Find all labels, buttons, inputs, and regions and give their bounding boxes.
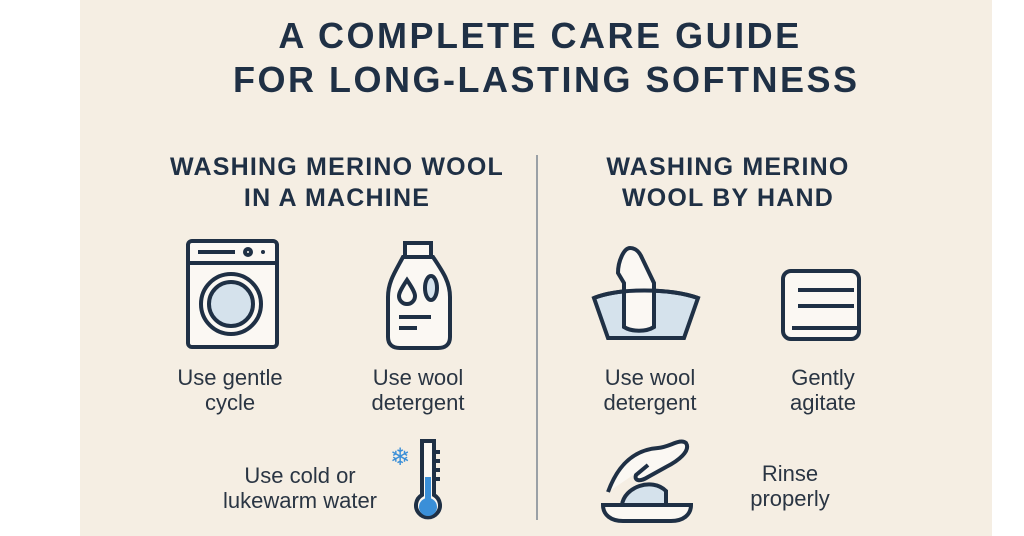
icon: hand rinsing xyxy=(601,440,693,523)
label: gentle cycle xyxy=(177,365,283,415)
label: rinse properly: properly xyxy=(750,486,830,511)
icon: folded towel xyxy=(781,269,861,341)
label: wool detergent hand xyxy=(604,365,696,415)
heading: hand xyxy=(606,153,850,212)
icon: washing machine xyxy=(186,239,279,349)
label: wool detergent machine xyxy=(372,365,464,415)
heading: hand: WOOL BY HAND xyxy=(622,184,834,212)
label: cold water: Use cold or xyxy=(244,463,356,488)
icon: basin with bottle xyxy=(592,246,700,340)
title xyxy=(233,15,860,100)
title: FOR LONG-LASTING SOFTNESS xyxy=(233,59,860,100)
label: rinse properly: Rinse xyxy=(762,461,818,486)
icon: detergent bottle xyxy=(386,241,452,350)
label: wool detergent hand: Use wool xyxy=(605,365,695,390)
heading: hand: WASHING MERINO xyxy=(606,153,850,181)
label: gentle cycle: Use gentle xyxy=(177,365,283,390)
icon: thermometer xyxy=(390,439,442,520)
icon: thermometer: ❄ xyxy=(390,443,410,471)
label: gently agitate: agitate xyxy=(790,390,856,415)
label: gently agitate: Gently xyxy=(791,365,855,390)
label: wool detergent hand: detergent xyxy=(604,390,696,415)
divider xyxy=(536,155,538,520)
title: A COMPLETE CARE GUIDE xyxy=(278,15,802,56)
label: rinse properly xyxy=(750,461,830,511)
heading: machine xyxy=(170,153,504,212)
label: gentle cycle: cycle xyxy=(205,390,255,415)
label: cold water: lukewarm water xyxy=(223,488,377,513)
label: cold water xyxy=(223,463,377,513)
heading: machine: WASHING MERINO WOOL xyxy=(170,153,504,181)
heading: machine: IN A MACHINE xyxy=(244,184,430,212)
label: gently agitate xyxy=(790,365,856,415)
label: wool detergent machine: detergent xyxy=(372,390,464,415)
label: wool detergent machine: Use wool xyxy=(373,365,463,390)
